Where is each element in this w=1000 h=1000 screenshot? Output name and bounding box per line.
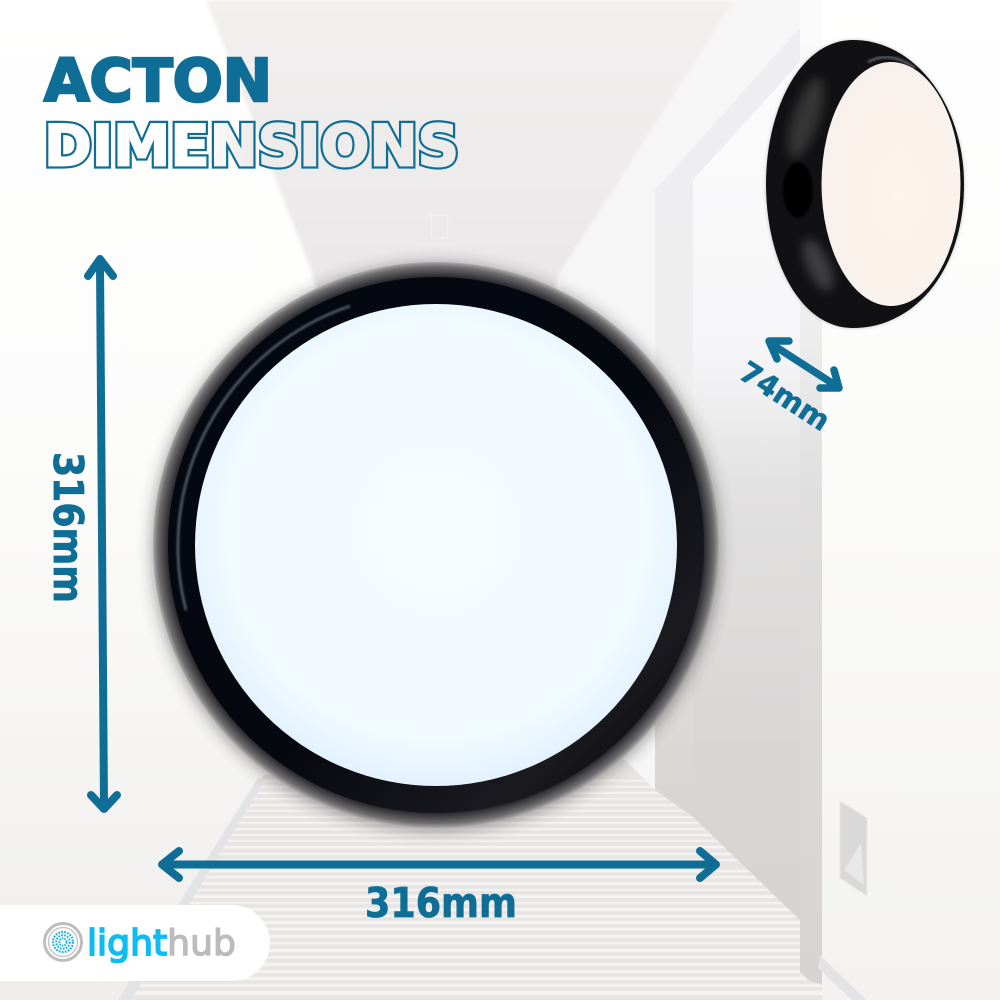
ring highlight bbox=[178, 306, 350, 610]
left skirting bbox=[118, 778, 266, 1000]
badge background bbox=[0, 905, 270, 981]
door panel bbox=[693, 62, 800, 920]
ceiling vent bbox=[431, 215, 448, 238]
ceiling bbox=[206, 0, 735, 340]
lamp body bbox=[766, 40, 964, 328]
corridor right wall bbox=[558, 0, 800, 1000]
label: height: 316mm bbox=[44, 452, 92, 603]
wall step light bbox=[840, 801, 867, 896]
logo wordmark: lighthub bbox=[87, 923, 236, 964]
logo icon bbox=[44, 924, 82, 960]
floor carpet bbox=[132, 758, 822, 1000]
arrow: height bbox=[88, 259, 117, 809]
title bbox=[44, 46, 459, 180]
label: width: 316mm bbox=[365, 879, 517, 927]
lamp diffuser bbox=[822, 62, 960, 306]
rim highlight bbox=[868, 57, 915, 68]
upper body sheen bbox=[781, 74, 831, 162]
door frame bbox=[655, 28, 800, 817]
heading: DIMENSIONS outline: DIMENSIONS bbox=[44, 114, 459, 180]
body glare bbox=[783, 162, 813, 218]
logo badge bbox=[0, 905, 270, 981]
arrow: width bbox=[162, 851, 716, 878]
large lamp front view bbox=[153, 262, 719, 830]
lamp black ring bbox=[168, 277, 704, 813]
door frame edge bbox=[800, 0, 822, 985]
label: depth: 74mm bbox=[733, 354, 836, 438]
right skirting bbox=[818, 955, 866, 1000]
lamp shadow bbox=[766, 40, 964, 328]
lamp halo bbox=[153, 262, 719, 828]
right wall bbox=[822, 0, 1000, 1000]
heading: DIMENSIONS outline: DIMENSIONS bbox=[44, 114, 459, 180]
lamp soft shadow bbox=[153, 264, 719, 830]
lower body sheen bbox=[797, 235, 839, 295]
arrow: depth bbox=[769, 341, 839, 388]
small lamp side view bbox=[766, 40, 964, 328]
heading: ACTON: ACTON bbox=[44, 46, 272, 115]
lamp diffuser bbox=[195, 304, 677, 786]
